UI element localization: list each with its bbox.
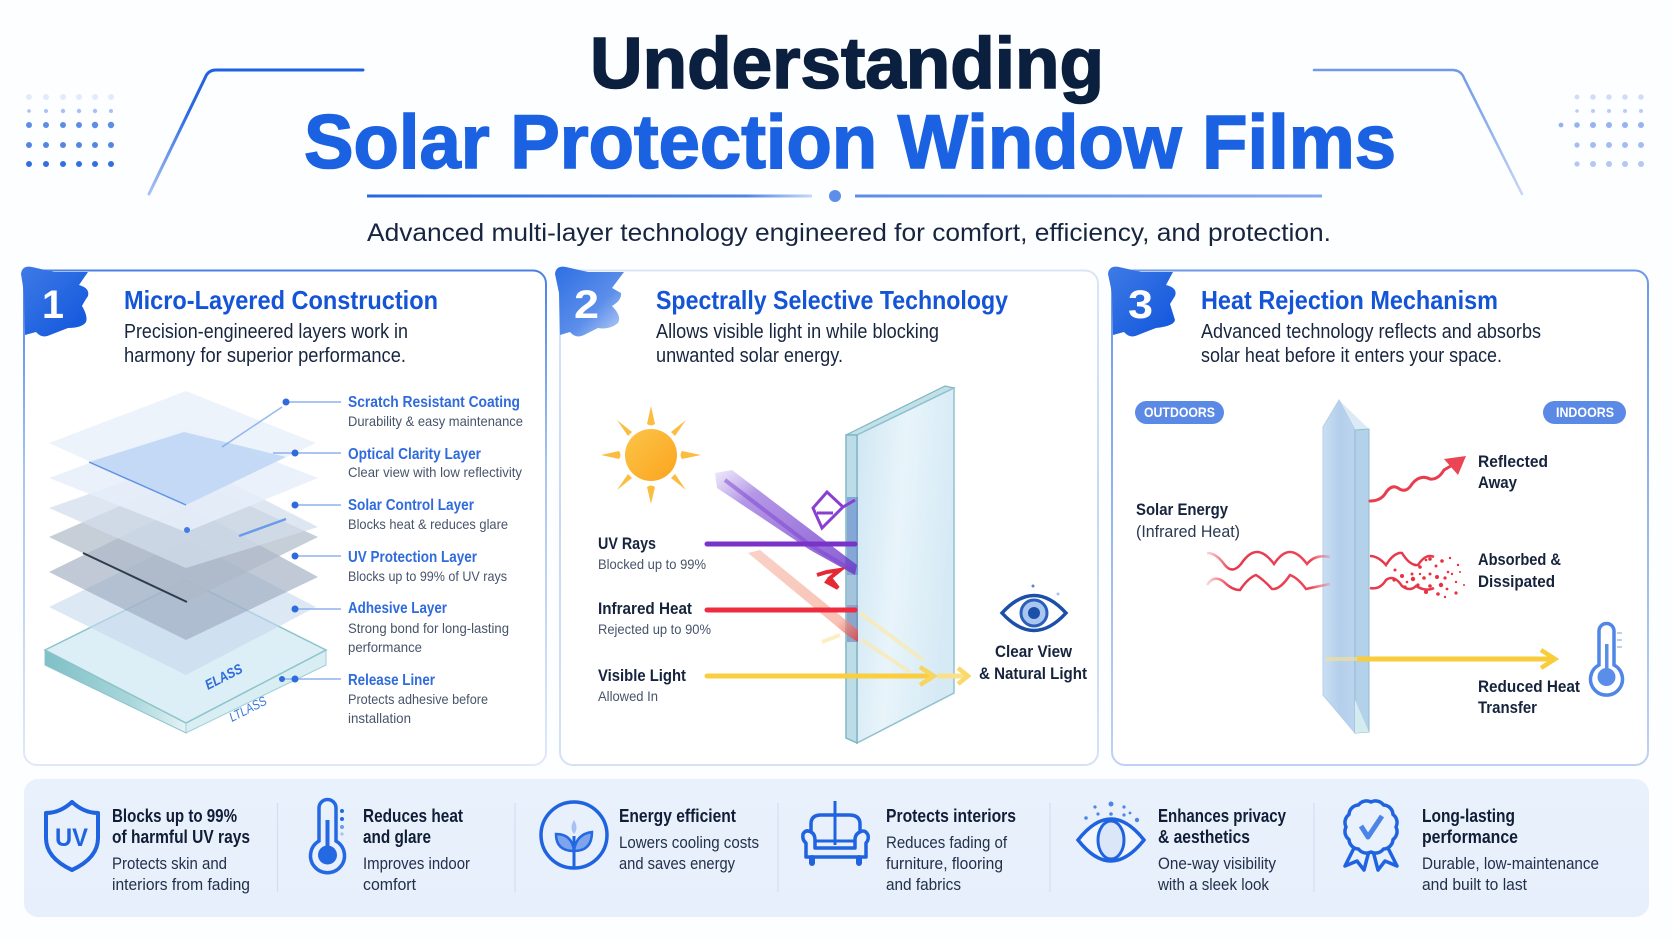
label: solar energy <box>1136 500 1240 541</box>
icon: sun <box>601 406 701 504</box>
label: absorbed and dissipated: Dissipated <box>1478 572 1555 591</box>
label: infrared heat: Infrared Heat <box>598 599 692 618</box>
decoration: left dot grid <box>26 94 114 167</box>
callout: scratch resistant coating: Scratch Resistant Coating <box>348 394 520 411</box>
panel 2 description: unwanted solar energy. <box>656 345 843 367</box>
benefit: protects interiors: furniture, flooring <box>886 854 1003 873</box>
benefit: privacy and aesthetics: One-way visibility <box>1158 854 1276 873</box>
benefit: long-lasting <box>1345 801 1599 894</box>
benefit: protects interiors: and fabrics <box>886 875 961 894</box>
callout: adhesive layer: Strong bond for long-lasting <box>348 620 509 636</box>
callout: scratch resistant coating <box>282 394 523 429</box>
label: clear view: & Natural Light <box>979 664 1087 683</box>
arrow: reduced heat transfer <box>1326 650 1555 668</box>
label: absorbed and dissipated <box>1478 550 1561 591</box>
benefit: UV protection: Protects skin and <box>112 854 227 873</box>
pill: outdoors: OUTDOORS <box>1144 404 1215 420</box>
benefit: energy efficient: Lowers cooling costs <box>619 833 759 852</box>
glass cross-section <box>1323 400 1369 733</box>
callout: release liner: Release Liner <box>348 672 435 689</box>
benefit: UV protection: of harmful UV rays <box>112 827 250 847</box>
glass base: ELASS <box>202 660 245 693</box>
UV protection layer <box>49 505 318 640</box>
benefit: heat and glare: Improves indoor <box>363 854 470 873</box>
icon: thermometer <box>310 800 344 873</box>
label: visible light: Visible Light <box>598 666 686 685</box>
benefit: privacy and aesthetics: with a sleek look <box>1157 875 1269 894</box>
label: reflected away: Away <box>1478 473 1517 492</box>
layer callouts <box>273 394 523 726</box>
panel 1 description: harmony for superior performance. <box>124 345 406 367</box>
clarity layer <box>49 427 318 532</box>
callout: UV protection layer: Blocks up to 99% of UV rays <box>348 568 507 584</box>
title line 2: Solar Protection Window Films <box>304 100 1396 185</box>
label: reduced heat transfer: Reduced Heat <box>1478 677 1580 696</box>
ray: infrared <box>707 608 855 612</box>
benefit: protects interiors: Reduces fading of <box>886 833 1007 852</box>
label: clear view <box>979 642 1087 683</box>
benefit: long-lasting: and built to last <box>1422 875 1527 894</box>
benefit: UV protection: interiors from fading <box>112 875 250 894</box>
benefit: UV protection: Blocks up to 99% <box>112 806 237 826</box>
benefit: long-lasting: performance <box>1422 827 1518 847</box>
decoration: right dot grid <box>1559 94 1644 167</box>
benefit: heat and glare <box>310 800 470 894</box>
badge 3: 3 <box>1128 283 1153 327</box>
benefit: heat and glare: comfort <box>363 875 416 894</box>
arrow: reflected wave <box>1370 456 1466 501</box>
top coating layer <box>49 391 316 505</box>
label: reflected away: Reflected <box>1478 452 1548 471</box>
beam: pale transmitted light <box>822 613 923 672</box>
label: infrared heat: Rejected up to 90% <box>598 621 711 637</box>
benefit: privacy and aesthetics <box>1078 802 1286 894</box>
benefit: protects interiors <box>803 801 1016 894</box>
label: solar energy: (Infrared Heat) <box>1136 522 1240 541</box>
glass pane <box>846 386 954 743</box>
callout: UV protection layer <box>292 549 507 584</box>
benefit: energy efficient <box>541 802 759 873</box>
badge 1: 1 <box>42 283 64 327</box>
title line 1: Understanding <box>590 24 1104 104</box>
subtitle: Advanced multi-layer technology engineered for comfort, efficiency, and protection. <box>367 219 1331 247</box>
beam: UV <box>715 470 857 575</box>
panel 2 card <box>560 270 1098 765</box>
label: clear view: Clear View <box>995 642 1073 661</box>
icon: UV shield <box>46 802 98 870</box>
pill: outdoors <box>1135 401 1224 424</box>
label: visible light <box>598 666 686 704</box>
benefits bar <box>24 779 1649 917</box>
callout: optical clarity layer: Clear view with low reflectivity <box>348 464 522 480</box>
panel: heat rejection mechanism <box>1108 267 1648 765</box>
adhesive layer <box>49 540 316 675</box>
callout: adhesive layer: Adhesive Layer <box>348 600 447 617</box>
benefit: protects interiors: Protects interiors <box>886 806 1016 826</box>
panel 3 description: solar heat before it enters your space. <box>1201 345 1502 367</box>
panel 2 description: Allows visible light in while blocking <box>656 321 939 343</box>
icon: sofa <box>803 801 868 863</box>
benefit: long-lasting: Durable, low-maintenance <box>1422 854 1599 873</box>
label: absorbed and dissipated: Absorbed & <box>1478 550 1561 569</box>
badge 1 <box>21 267 88 336</box>
glass base: LTLASS <box>227 693 269 725</box>
badge 3 <box>1108 267 1176 336</box>
panel 1 description: Precision-engineered layers work in <box>124 321 408 343</box>
panel 3 card <box>1112 270 1648 765</box>
panel 2 heading: Spectrally Selective Technology <box>656 285 1008 315</box>
benefit: energy efficient: and saves energy <box>619 854 735 873</box>
decoration: right corner line <box>1314 70 1522 194</box>
panel: micro-layered construction <box>21 267 546 765</box>
callout: UV protection layer: UV Protection Layer <box>348 549 477 566</box>
callout: optical clarity layer <box>273 446 522 480</box>
ray: visible light <box>707 667 968 685</box>
icon: leaf in circle <box>541 802 607 868</box>
label: reduced heat transfer <box>1478 677 1580 717</box>
badge 2: 2 <box>574 283 599 327</box>
icon: eye <box>1002 584 1066 630</box>
layer stack illustration <box>45 391 326 733</box>
callout: release liner <box>279 672 488 726</box>
callout: solar control layer: Solar Control Layer <box>348 497 474 514</box>
panel 3 heading: Heat Rejection Mechanism <box>1201 285 1498 315</box>
optical layer <box>49 460 318 568</box>
callout: adhesive layer <box>292 600 509 655</box>
icon: eye with dots <box>1078 802 1144 861</box>
label: solar energy: Solar Energy <box>1136 500 1228 519</box>
decoration: left corner line <box>149 70 363 194</box>
bar background <box>24 779 1649 917</box>
label: infrared heat <box>598 599 711 637</box>
panel 3 description: Advanced technology reflects and absorbs <box>1201 321 1541 343</box>
label: reduced heat transfer: Transfer <box>1478 698 1537 717</box>
icon: UV shield: UV <box>55 824 88 852</box>
title divider <box>367 190 1322 202</box>
beam: infrared <box>748 550 858 642</box>
waves: incoming infrared <box>1207 552 1330 590</box>
title <box>304 24 1396 185</box>
callout: adhesive layer: performance <box>348 639 422 655</box>
glass base <box>45 580 326 733</box>
label: visible light: Allowed In <box>598 688 658 704</box>
scribble: UV reflection <box>813 492 855 528</box>
solar control layer <box>49 477 318 602</box>
panel 1 heading: Micro-Layered Construction <box>124 285 438 315</box>
callout: release liner: installation <box>348 710 411 726</box>
leader accents <box>184 407 286 536</box>
benefit: UV protection <box>46 802 250 894</box>
benefit: privacy and aesthetics: & aesthetics <box>1158 827 1250 847</box>
benefit: heat and glare: Reduces heat <box>363 806 463 826</box>
scribble: infrared reflection <box>817 570 840 588</box>
ray: UV <box>707 542 855 546</box>
panel: spectrally selective technology <box>555 267 1098 765</box>
icon: rosette with check <box>1345 801 1397 870</box>
benefit: long-lasting: Long-lasting <box>1422 806 1515 826</box>
waves: absorbed <box>1370 553 1434 590</box>
label: UV rays: Blocked up to 99% <box>598 556 706 572</box>
pill: indoors: INDOORS <box>1556 404 1614 420</box>
benefit: privacy and aesthetics: Enhances privacy <box>1158 806 1286 826</box>
callout: solar control layer: Blocks heat & reduces glare <box>348 516 508 532</box>
label: UV rays: UV Rays <box>598 534 656 553</box>
pill: indoors <box>1543 401 1626 424</box>
particles: dissipated heat <box>1392 557 1465 598</box>
panel 1 card <box>24 270 546 765</box>
callout: release liner: Protects adhesive before <box>348 691 488 707</box>
badge 2 <box>555 267 624 336</box>
benefit: heat and glare: and glare <box>363 827 431 847</box>
benefit: energy efficient: Energy efficient <box>619 806 736 826</box>
callout: scratch resistant coating: Durability & easy maintenance <box>348 413 523 429</box>
label: reflected away <box>1478 452 1548 492</box>
callout: solar control layer <box>292 497 508 532</box>
callout: optical clarity layer: Optical Clarity Layer <box>348 446 481 463</box>
label: UV rays <box>598 534 706 572</box>
icon: thermometer <box>1590 624 1623 695</box>
